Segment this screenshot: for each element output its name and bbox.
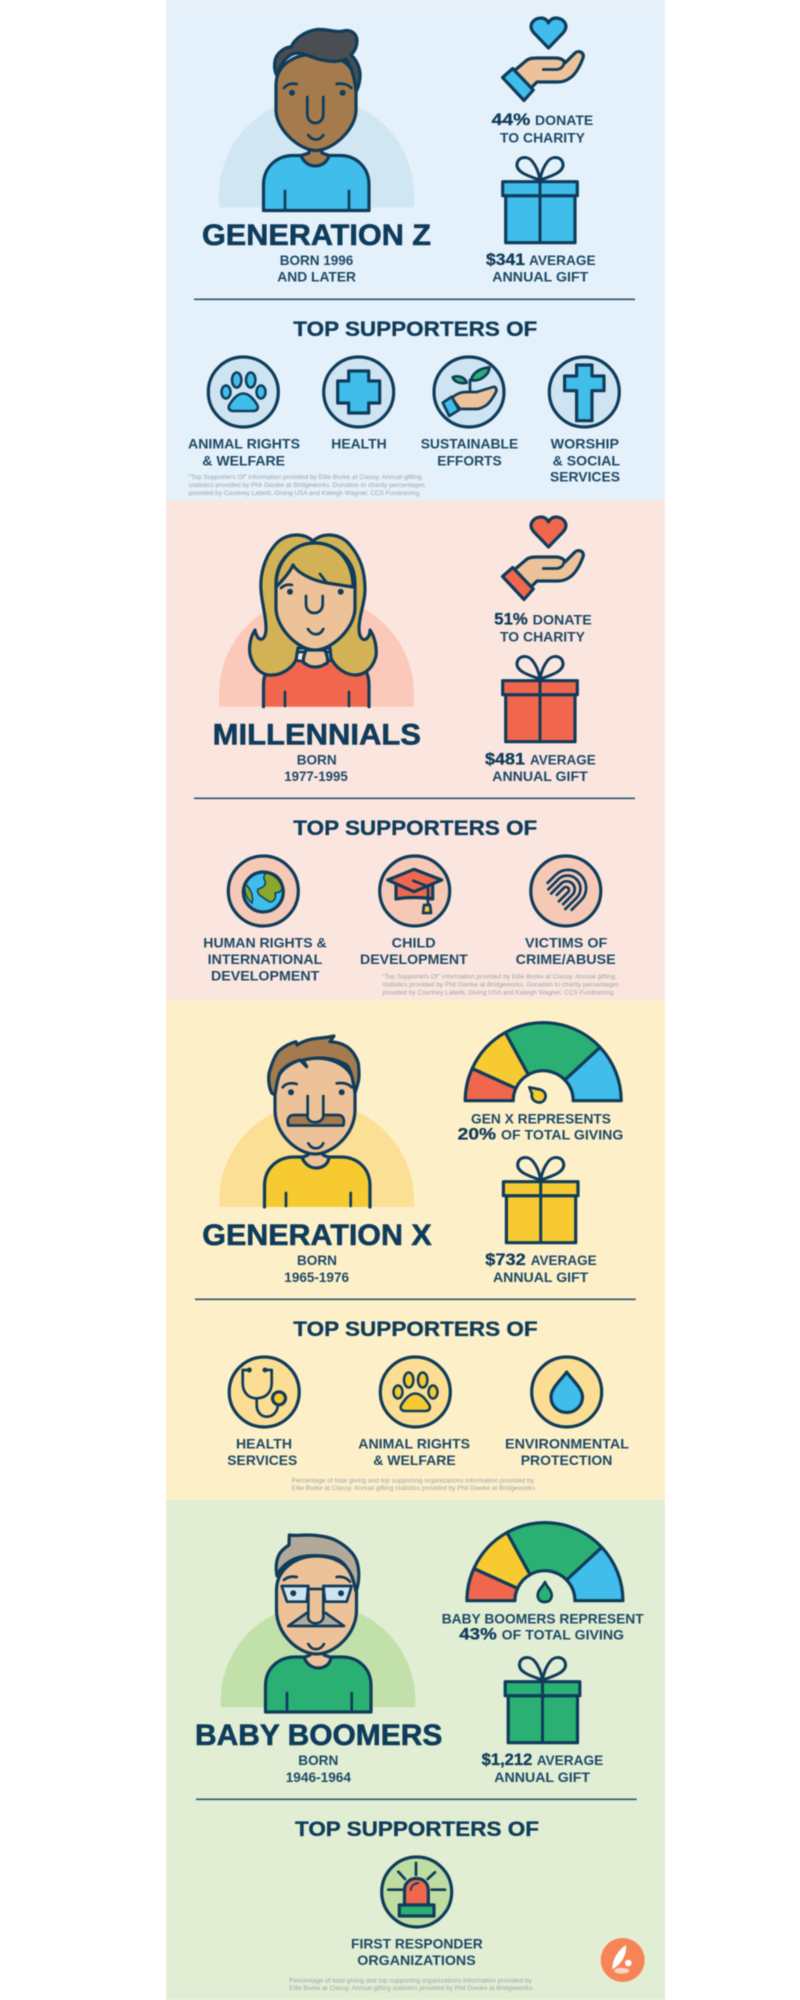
label: sustainable efforts: EFFORTS	[437, 452, 502, 468]
logo: orange badge	[601, 1938, 645, 1982]
gauge: Boomers share of giving	[467, 1523, 623, 1602]
stat: 20% of giving: OF TOTAL GIVING	[501, 1126, 623, 1142]
label: worship and social services: SERVICES	[550, 469, 620, 485]
heading: top supporters: TOP SUPPORTERS OF	[293, 1317, 538, 1341]
icon: heart in hand	[502, 18, 583, 100]
footnote: Gen X sources	[292, 1478, 537, 1492]
label: first responder organizations: FIRST RESPONDER	[351, 1935, 483, 1951]
stat: 43% of giving	[442, 1610, 644, 1643]
stat: 43% of giving: 43%	[459, 1625, 497, 1643]
label: child development: CHILD	[392, 934, 436, 950]
label: animal rights	[358, 1435, 470, 1468]
birth years: Generation Z	[277, 252, 356, 285]
stat: 43% of giving: OF TOTAL GIVING	[502, 1626, 624, 1642]
stat: 44% donate	[492, 111, 593, 146]
footnote: Millennials sources: provided by Courtney Labetti, Giving USA and Kaleigh Wagner, CCS Fundraising.	[382, 990, 615, 996]
label: animal rights: ANIMAL RIGHTS	[358, 1435, 470, 1451]
birth years: Millennials: BORN	[297, 751, 337, 767]
stat: 44% donate: TO CHARITY	[500, 130, 586, 146]
label: child development	[360, 934, 468, 967]
stat: 51% donate	[494, 610, 592, 645]
footnote: Boomers sources: Ellie Burke at Classy. Annual gifting statistics provided by Phil Gwoke at Bridgeworks.	[289, 1986, 534, 1992]
icon: gift	[503, 1158, 578, 1243]
stat: average gift: AVERAGE	[531, 1252, 597, 1268]
title: Generation Z: GENERATION Z	[202, 219, 431, 252]
stat: average gift: ANNUAL GIFT	[492, 269, 589, 285]
footnote: Boomers sources: Percentage of total giving and top supporting organizations information provided by	[289, 1978, 532, 1984]
label: sustainable efforts: SUSTAINABLE	[421, 435, 518, 451]
icon: heart in hand	[502, 517, 583, 600]
birth years: Generation X: BORN	[297, 1252, 337, 1268]
icon: stethoscope	[229, 1357, 299, 1427]
stat: average gift: AVERAGE	[529, 252, 596, 268]
panel: Millennials	[166, 500, 665, 1000]
stat: average gift: $341	[486, 251, 525, 269]
panel: Generation X	[166, 1000, 665, 1500]
birth years: Millennials	[284, 751, 348, 784]
icon: gift	[505, 1658, 580, 1743]
stat: average gift	[485, 750, 596, 784]
footnote: Millennials sources	[382, 974, 619, 996]
label: environmental protection	[505, 1435, 629, 1468]
label: animal rights: ANIMAL RIGHTS	[188, 435, 300, 451]
label: victims of crime: VICTIMS OF	[525, 934, 608, 950]
birth years: Generation Z: BORN 1996	[280, 252, 353, 268]
icon: gift	[503, 657, 577, 742]
footnote: Boomers sources	[289, 1978, 534, 1992]
birth years: Baby Boomers: BORN	[298, 1752, 338, 1768]
footnote: Gen X sources: Ellie Burke at Classy. Annual gifting statistics provided by Phil Gwoke at Bridgeworks.	[292, 1486, 537, 1492]
stat: 44% donate: DONATE	[535, 112, 593, 128]
icon: water drop	[532, 1357, 602, 1427]
heading: top supporters: TOP SUPPORTERS OF	[293, 816, 537, 840]
label: first responder organizations: ORGANIZATIONS	[357, 1952, 476, 1968]
title: Generation X: GENERATION X	[202, 1219, 432, 1252]
birth years: Generation Z: AND LATER	[277, 269, 356, 285]
stat: average gift: $1,212	[482, 1751, 532, 1769]
label: worship and social services: & SOCIAL	[553, 452, 620, 468]
icon: medical cross	[324, 357, 394, 427]
footnote: Millennials sources: statistics provided by Phil Gwoke at Bridgeworks. Donation to charity percentages	[382, 982, 619, 988]
label: health services: HEALTH	[236, 1435, 292, 1451]
footnote: Millennials sources: “Top Supporters Of” information provided by Ellie Burke at Classy. Annual gifting	[382, 974, 615, 980]
label: child development: DEVELOPMENT	[360, 951, 468, 967]
icon: paw	[380, 1357, 450, 1427]
icon: cross	[549, 357, 619, 427]
label: human rights: DEVELOPMENT	[211, 968, 320, 984]
icon: gift	[503, 158, 577, 243]
label: worship and social services: WORSHIP	[551, 435, 619, 451]
stat: average gift: ANNUAL GIFT	[493, 1269, 589, 1285]
icon: emergency siren	[382, 1857, 452, 1927]
stat: average gift	[485, 1251, 597, 1285]
birth years: Baby Boomers: 1946-1964	[286, 1769, 351, 1785]
footnote: Generation Z sources: “Top Supporters Of” information provided by Ellie Burke at Classy. Annual gifting	[189, 475, 422, 481]
label: environmental protection: ENVIRONMENTAL	[505, 1435, 629, 1451]
title: Baby Boomers: BABY BOOMERS	[195, 1719, 442, 1752]
portrait: Baby Boomer	[221, 1535, 415, 1712]
title: Millennials: MILLENNIALS	[213, 718, 421, 751]
stat: average gift: AVERAGE	[537, 1752, 603, 1768]
birth years: Millennials: 1977-1995	[284, 768, 348, 784]
label: animal rights: & WELFARE	[373, 1452, 456, 1468]
label: human rights: INTERNATIONAL	[208, 951, 323, 967]
icon: globe	[228, 856, 298, 926]
label: animal rights: & WELFARE	[202, 452, 285, 468]
stat: average gift: $481	[485, 750, 525, 768]
icon: fingerprint	[531, 856, 601, 926]
label: health services	[227, 1435, 297, 1468]
heading: top supporters: TOP SUPPORTERS OF	[293, 317, 537, 341]
heading: top supporters: TOP SUPPORTERS OF	[295, 1817, 539, 1841]
portrait: Millennial	[219, 535, 414, 707]
stat: average gift: ANNUAL GIFT	[494, 1769, 590, 1785]
panel: Generation Z	[166, 0, 665, 500]
stat: average gift: $732	[485, 1251, 526, 1269]
label: victims of crime: CRIME/ABUSE	[516, 951, 616, 967]
stat: 20% of giving: GEN X REPRESENTS	[471, 1110, 611, 1126]
stat: average gift: AVERAGE	[530, 751, 596, 767]
footnote: Generation Z sources: provided by Courtney Labetti, Giving USA and Kaleigh Wagner, CCS Fundraising.	[189, 491, 421, 497]
birth years: Baby Boomers	[286, 1752, 351, 1785]
label: first responder organizations	[351, 1935, 483, 1968]
footnote: Generation Z sources: statistics provided by Phil Gwoke at Bridgeworks. Donation to charity percentages	[189, 483, 425, 489]
stat: average gift: ANNUAL GIFT	[492, 768, 588, 784]
birth years: Generation X	[284, 1252, 349, 1285]
label: environmental protection: PROTECTION	[521, 1452, 612, 1468]
stat: 51% donate: DONATE	[533, 611, 592, 627]
stat: 44% donate: 44%	[492, 111, 531, 129]
icon: sprout in hand	[434, 357, 504, 427]
label: human rights: HUMAN RIGHTS &	[203, 934, 327, 950]
stat: average gift	[486, 251, 596, 285]
label: sustainable efforts	[421, 435, 518, 468]
label: victims of crime	[516, 934, 616, 967]
label: animal rights	[188, 435, 300, 468]
stat: 43% of giving: BABY BOOMERS REPRESENT	[442, 1610, 644, 1626]
label: health: HEALTH	[331, 435, 387, 451]
footnote: Generation Z sources	[189, 475, 425, 497]
stat: 20% of giving: 20%	[458, 1125, 496, 1143]
icon: paw	[208, 357, 278, 427]
stat: 51% donate: TO CHARITY	[500, 629, 586, 645]
label: human rights	[203, 934, 327, 984]
stat: average gift	[482, 1751, 603, 1785]
stat: 51% donate: 51%	[494, 610, 528, 628]
stat: 20% of giving	[458, 1110, 623, 1143]
panel: Baby Boomers	[166, 1500, 665, 2000]
icon: graduation cap	[380, 856, 450, 926]
label: health services: SERVICES	[227, 1452, 297, 1468]
gauge: Gen X share of giving	[465, 1023, 621, 1103]
footnote: Gen X sources: Percentage of total giving and top supporting organizations information provided by	[292, 1478, 534, 1484]
portrait: Generation Z	[219, 29, 414, 210]
birth years: Generation X: 1965-1976	[284, 1269, 349, 1285]
label: worship and social services	[550, 435, 620, 485]
portrait: Generation X	[219, 1036, 414, 1207]
